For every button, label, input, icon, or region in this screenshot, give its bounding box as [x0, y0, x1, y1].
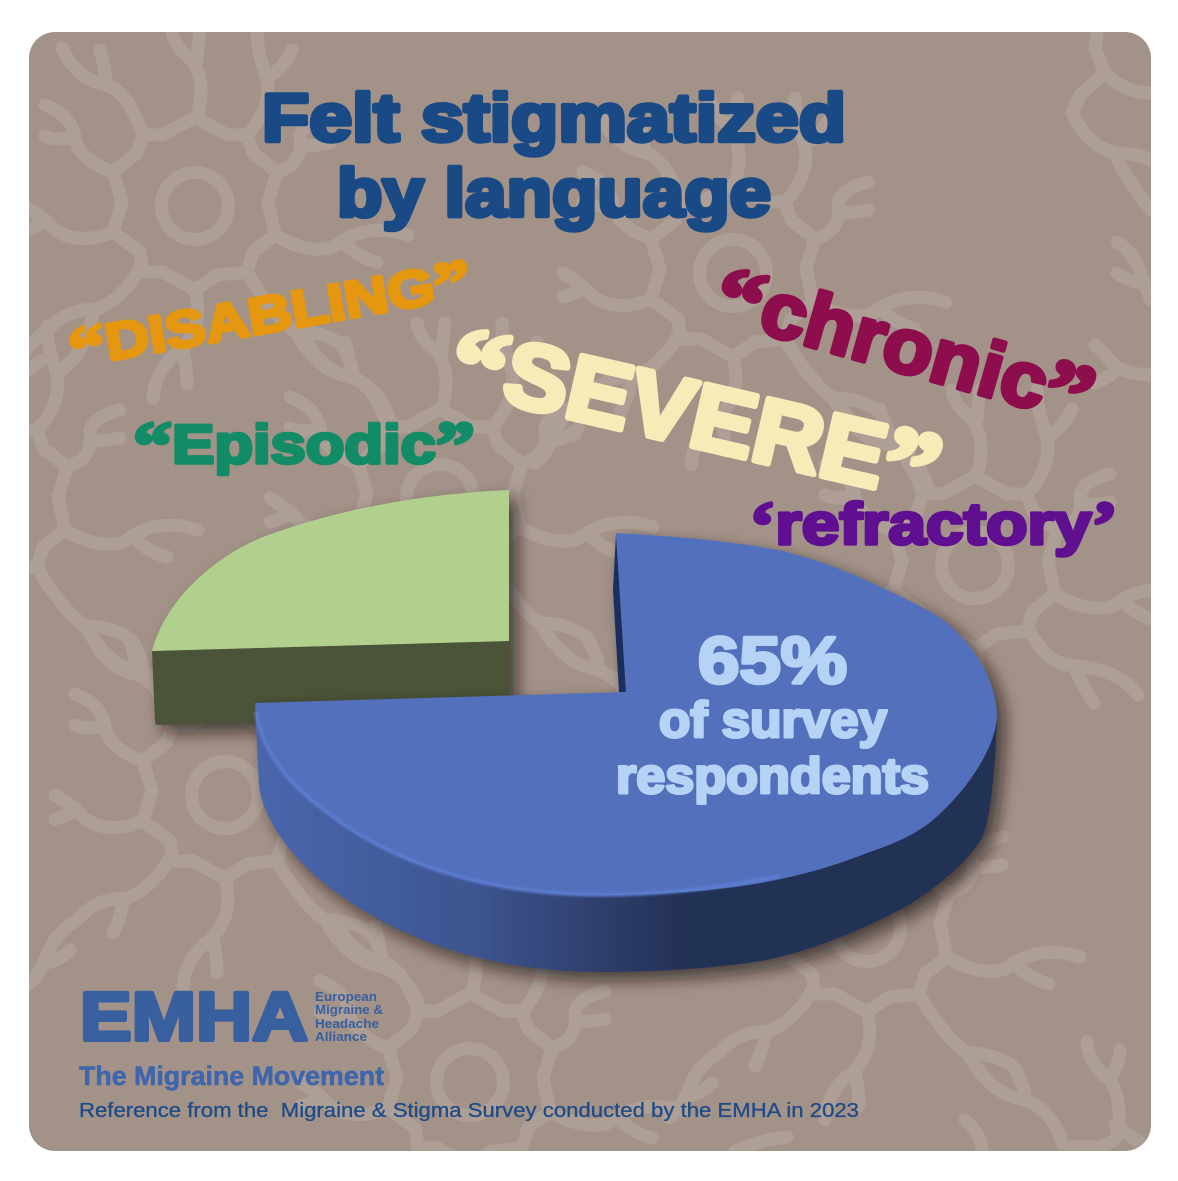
- logo: EMHA: EMHA: [80, 978, 308, 1055]
- title: Felt stigmatized: [262, 80, 846, 156]
- pie label: 65% of survey respondents: of survey: [659, 692, 887, 748]
- word: Episodic: “: [133, 407, 172, 483]
- pie label: 65% of survey respondents: 65%: [698, 623, 847, 697]
- word: refractory: ’: [1092, 487, 1118, 563]
- reference note: Reference from the Migraine & Stigma Survey conducted by the EMHA in 2023: [79, 1100, 859, 1122]
- word: refractory: ‘: [749, 487, 775, 563]
- pie label: 65% of survey respondents: [616, 623, 929, 804]
- word: SEVERE: ”: [871, 403, 952, 532]
- title: by language: [337, 155, 771, 231]
- tagline: The Migraine Movement: [79, 1061, 384, 1091]
- logo: EMHA: Headache: [315, 1016, 379, 1031]
- pie slice: green 3D wedge: [152, 490, 509, 725]
- word: DISABLING: DISABLING: [101, 257, 439, 372]
- logo: EMHA: Migraine &: [315, 1002, 383, 1017]
- logo: EMHA: [80, 978, 383, 1055]
- word: Episodic: Episodic: [172, 413, 436, 475]
- word: SEVERE: “: [438, 303, 519, 432]
- word: chronic: “: [703, 245, 777, 356]
- word: SEVERE: SEVERE: [495, 322, 896, 508]
- pie slice: blue 3D wedge: [255, 533, 997, 972]
- logo: EMHA: European: [315, 989, 377, 1004]
- word: Episodic: ”: [436, 407, 475, 483]
- word: refractory: refractory: [775, 492, 1092, 557]
- logo: EMHA: Alliance: [315, 1029, 367, 1044]
- pie label: 65% of survey respondents: respondents: [616, 748, 929, 804]
- word: DISABLING: ”: [428, 245, 477, 321]
- word: DISABLING: “: [63, 309, 112, 386]
- word: chronic: chronic: [752, 263, 1058, 427]
- word: chronic: ”: [1032, 338, 1106, 449]
- title: [262, 80, 846, 231]
